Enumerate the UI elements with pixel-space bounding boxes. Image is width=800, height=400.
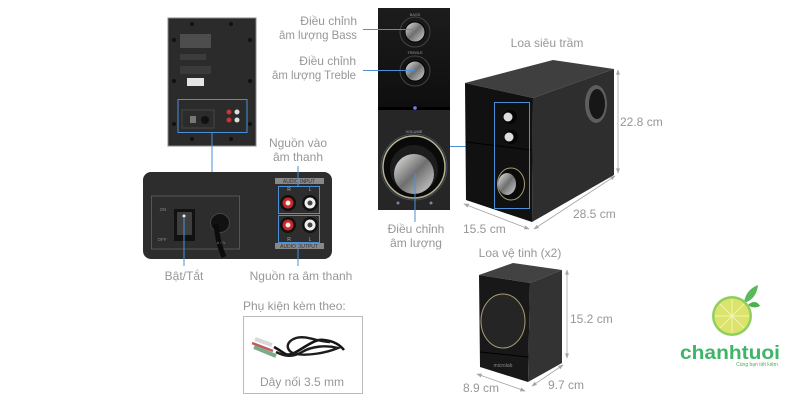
label: audio output: Nguồn ra âm thanh — [250, 269, 352, 283]
rear panel close-up: AUDIO INPUT — [283, 179, 315, 185]
connector to subwoofer controls — [450, 146, 494, 148]
subwoofer height dimension — [618, 70, 663, 173]
label: treble control: âm lượng Treble — [272, 68, 356, 82]
satellite title: Loa vệ tinh (x2) — [479, 246, 561, 260]
satellite speaker illustration — [479, 263, 562, 382]
label: treble control — [272, 54, 415, 82]
satellite depth dimension — [532, 365, 584, 392]
back view of satellite speaker — [168, 18, 256, 146]
satellite height dimension: 15.2 cm — [570, 312, 613, 326]
label: bass control: Điều chỉnh — [300, 14, 357, 28]
label: volume control: âm lượng — [390, 236, 442, 250]
label: treble control: Điều chỉnh — [299, 54, 356, 68]
rear panel close-up — [143, 172, 332, 259]
accessory heading: Phụ kiện kèm theo: — [243, 299, 346, 313]
label: audio input: Nguồn vào — [269, 136, 327, 150]
label: audio output — [250, 243, 352, 283]
connector line to rear panel — [211, 133, 213, 172]
rear panel close-up: ON — [160, 207, 166, 212]
logo: chanhtuoi — [680, 285, 780, 368]
satellite height dimension — [567, 270, 613, 358]
satellite width dimension: 8.9 cm — [463, 381, 499, 395]
subwoofer width dimension: 15.5 cm — [463, 222, 506, 236]
logo: chanhtuoi: Cùng bạn tiết kiệm — [736, 362, 778, 368]
satellite depth dimension: 9.7 cm — [548, 378, 584, 392]
front control strip close-up: TREBLE — [407, 50, 423, 55]
subwoofer illustration — [465, 60, 614, 222]
rear panel close-up: R — [287, 237, 291, 243]
front control strip close-up — [378, 8, 450, 210]
accessory box: audio cable: Dây nối 3.5 mm — [260, 375, 344, 389]
label: audio input: âm thanh — [273, 150, 323, 164]
label: bass control: âm lượng Bass — [279, 28, 357, 42]
front control strip close-up: BASS — [410, 12, 421, 17]
subwoofer depth dimension: 28.5 cm — [573, 207, 616, 221]
accessory box: audio cable — [244, 316, 362, 394]
label: volume control — [388, 173, 444, 250]
subwoofer width dimension — [463, 204, 529, 236]
rear panel close-up: R — [287, 187, 291, 193]
subwoofer title: Loa siêu trầm — [511, 36, 583, 50]
subwoofer depth dimension — [534, 176, 616, 229]
subwoofer height dimension: 22.8 cm — [620, 115, 663, 129]
label: power switch: Bật/Tắt — [165, 268, 204, 283]
satellite width dimension — [463, 374, 525, 395]
logo: chanhtuoi: chanhtuoi — [680, 343, 780, 364]
rear panel close-up: L — [309, 237, 312, 243]
front control strip close-up: VOLUME — [406, 129, 423, 134]
rear panel close-up: A / N — [217, 240, 225, 245]
label: power switch — [165, 217, 204, 283]
satellite speaker illustration: microlab — [494, 363, 513, 369]
rear panel close-up: AUDIO OUTPUT — [280, 244, 318, 250]
rear panel close-up: L — [309, 187, 312, 193]
label: bass control — [279, 14, 415, 42]
label: volume control: Điều chỉnh — [388, 222, 444, 236]
label: audio input — [269, 136, 327, 187]
rear panel close-up: OFF — [158, 237, 167, 242]
